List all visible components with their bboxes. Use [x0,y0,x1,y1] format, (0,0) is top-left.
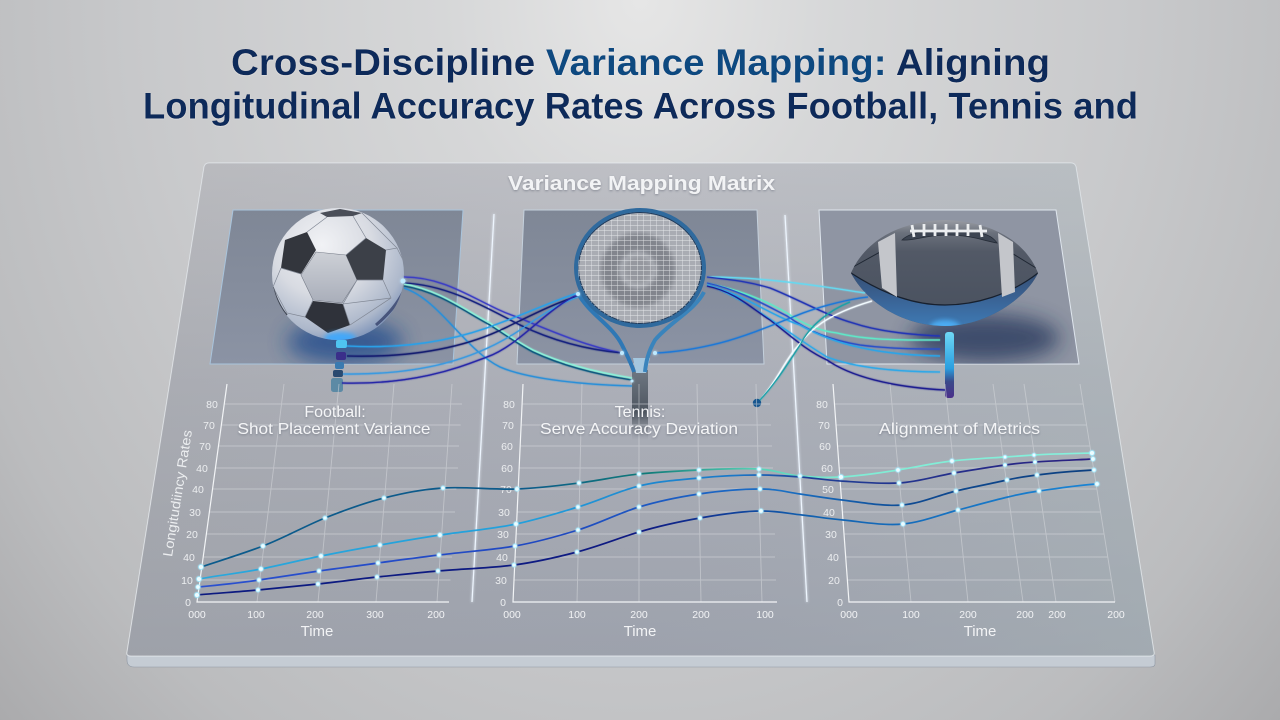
alignment chart y ticks: 60 [821,463,833,475]
alignment chart title: Alignment of Metrics [879,421,1040,438]
alignment chart x ticks: 200 [1107,609,1125,621]
football chart x ticks: 000 [188,609,206,621]
title: Longitudinal Accuracy Rates Across Football, Tennis and [143,86,1138,126]
tennis chart x ticks [503,609,774,621]
racket throat [633,358,650,373]
football chart title: Football: [304,404,366,421]
racket head [576,210,704,326]
tennis chart grid [514,384,776,602]
tennis chart x ticks: 100 [756,609,774,621]
football chart y ticks: 0 [185,597,191,609]
title [143,42,1138,126]
panel: american football sub-panel [819,210,1079,364]
alignment chart x ticks [840,609,1125,621]
tennis chart x ticks: 200 [692,609,710,621]
endpoint dot [753,399,761,407]
alignment chart x ticks: 200 [1016,609,1034,621]
football chart title: Shot Placement Variance [238,421,431,438]
football chart y ticks: 40 [183,552,195,564]
panel: tennis sub-panel [517,210,764,364]
football chart x ticks: 200 [306,609,324,621]
connector: right chips [945,332,954,398]
football chart y ticks: 80 [206,399,218,411]
alignment chart y ticks: 40 [827,552,839,564]
tennis chart y ticks: 60 [501,441,513,453]
line 3: third series [198,470,1094,587]
alignment chart x axis label: Time [964,623,996,640]
connector glow points [400,278,657,382]
tennis chart y ticks: 30 [495,575,507,587]
data point markers [195,451,1099,597]
alignment chart y ticks: 0 [837,597,843,609]
tennis chart x ticks: 100 [568,609,586,621]
tennis chart axes [513,384,777,602]
alignment chart y ticks: 70 [818,420,830,432]
football laces [910,224,987,237]
alignment chart x ticks: 100 [902,609,920,621]
football chart grid [200,384,462,602]
tennis chart y ticks: 40 [496,552,508,564]
tennis chart x ticks: 000 [503,609,521,621]
heading: Variance Mapping Matrix: Variance Mapping Matrix [508,173,775,195]
football chart x ticks: 200 [427,609,445,621]
chart: alignment of metrics [816,384,1125,640]
alignment chart x ticks: 000 [840,609,858,621]
alignment chart axes [833,384,1115,602]
line 4: bottom series [197,484,1097,595]
tennis chart y ticks: 30 [498,507,510,519]
football chart x ticks [188,609,445,621]
data lines across charts [197,453,1097,595]
tennis chart y ticks: 80 [503,399,515,411]
alignment chart y ticks: 40 [823,507,835,519]
tennis chart y ticks: 0 [500,597,506,609]
line 2: second series [199,459,1093,579]
football chart x ticks: 100 [247,609,265,621]
divider: right glowing line [785,215,807,602]
football chart y ticks: 40 [192,484,204,496]
racket grip [632,370,648,440]
icon: tennis racket [574,208,706,440]
title: Cross-Discipline Variance Mapping: Aligning [231,42,1050,83]
tennis chart title: Tennis: [615,404,665,421]
football chart y ticks: 10 [181,575,193,587]
chart: tennis serve accuracy deviation [495,384,777,640]
football chart axes [197,384,449,602]
connector: football chips [331,340,347,392]
connector threads: football to tennis [342,277,632,386]
alignment chart y ticks: 80 [816,399,828,411]
alignment chart y ticks [816,399,843,609]
tennis chart x axis label: Time [624,623,656,640]
icon: soccer ball [272,208,405,364]
football chart y ticks: 70 [203,420,215,432]
football chart x axis label: Time [301,623,333,640]
alignment chart y ticks: 60 [819,441,831,453]
alignment chart y ticks: 50 [822,484,834,496]
tennis chart y ticks: 70 [500,484,512,496]
football chart y ticks: 20 [186,529,198,541]
football chart y ticks: 30 [189,507,201,519]
icon: american football [851,220,1060,362]
alignment chart y ticks: 30 [825,529,837,541]
football chart y ticks: 40 [196,463,208,475]
football chart y axis label: Longitudiincy Rates [160,429,195,558]
tennis chart y ticks: 60 [501,463,513,475]
football chart x ticks: 300 [366,609,384,621]
tennis chart y ticks: 30 [497,529,509,541]
line 1: top series [201,453,1092,567]
alignment chart x ticks: 200 [1048,609,1066,621]
panel: football sub-panel [210,210,463,364]
panel: glass matrix board [127,163,1155,667]
alignment chart x ticks: 200 [959,609,977,621]
football chart y ticks [181,399,218,609]
chart: football shot placement variance [160,384,462,640]
tennis chart title [540,404,738,438]
tennis chart x ticks: 200 [630,609,648,621]
tennis chart title: Serve Accuracy Deviation [540,421,738,438]
tennis chart y ticks: 70 [502,420,514,432]
divider: left glowing line [472,214,494,602]
football chart title [238,404,431,438]
connector threads: tennis to football [655,277,945,403]
tennis chart y ticks [495,399,515,609]
football chart y ticks: 70 [199,441,211,453]
alignment chart y ticks: 20 [828,575,840,587]
alignment chart grid [834,384,1115,602]
